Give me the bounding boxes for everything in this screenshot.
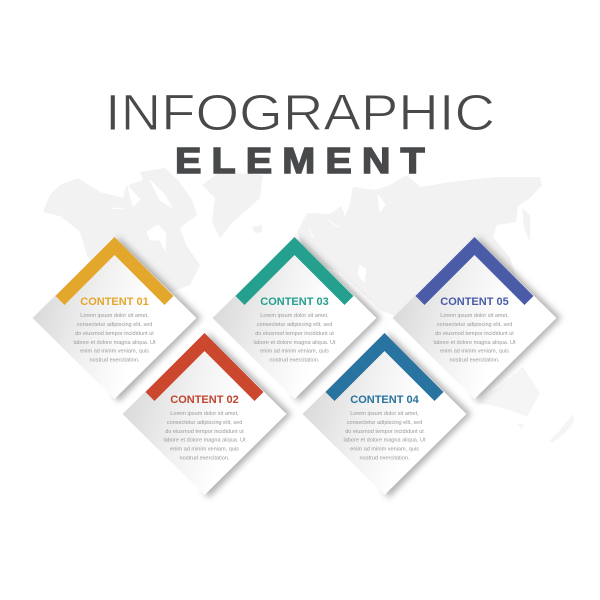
- heading: CONTENT 01: [80, 296, 149, 308]
- body text: labore et dolore magna aliqua. Ut: [433, 340, 516, 346]
- map: iceland: [252, 225, 262, 233]
- body text: labore et dolore magna aliqua. Ut: [343, 438, 426, 444]
- chevron: [236, 237, 354, 305]
- body text: do eiusmod tempor incididunt ut: [165, 429, 244, 435]
- body text: nostrud exercitation.: [90, 358, 140, 364]
- body text: do eiusmod tempor incididunt ut: [75, 331, 154, 337]
- body text: Lorem ipsum dolor sit amet,: [260, 313, 329, 319]
- body text: consectetur adipiscing elit, sed: [257, 322, 332, 328]
- chevron: [146, 333, 264, 401]
- body text: enim ad minim veniam, quis: [440, 348, 509, 354]
- map: new zealand: [549, 414, 574, 443]
- chevron: [56, 237, 174, 305]
- body text: nostrud exercitation.: [180, 456, 230, 462]
- map: bays and inlets: [112, 180, 385, 282]
- map: kamchatka and japan: [522, 208, 530, 242]
- body text: consectetur adipiscing elit, sed: [347, 420, 422, 426]
- heading: CONTENT 03: [260, 296, 329, 308]
- body text: nostrud exercitation.: [270, 358, 320, 364]
- world map background: [25, 168, 574, 443]
- map: greenland: [202, 172, 263, 238]
- body text: enim ad minim veniam, quis: [350, 446, 419, 452]
- panel: content 02: [122, 332, 292, 498]
- body text: do eiusmod tempor incididunt ut: [255, 331, 334, 337]
- title: INFOGRAPHIC: INFOGRAPHIC: [105, 84, 495, 141]
- body text: labore et dolore magna aliqua. Ut: [73, 340, 156, 346]
- panel: content 01: [32, 236, 202, 402]
- body text: Lorem ipsum dolor sit amet,: [80, 313, 149, 319]
- map: eurasia: [297, 175, 542, 330]
- heading: CONTENT 02: [170, 394, 239, 406]
- body text: Lorem ipsum dolor sit amet,: [170, 411, 239, 417]
- map: australia: [475, 367, 540, 417]
- body text: nostrud exercitation.: [450, 358, 500, 364]
- body text: labore et dolore magna aliqua. Ut: [253, 340, 336, 346]
- title: ELEMENT: ELEMENT: [175, 142, 425, 182]
- body text: enim ad minim veniam, quis: [260, 348, 329, 354]
- body text: Lorem ipsum dolor sit amet,: [440, 313, 509, 319]
- chevron: [326, 333, 444, 401]
- map: north america: [25, 168, 200, 300]
- chevron: [416, 237, 534, 305]
- body text: do eiusmod tempor incididunt ut: [435, 331, 514, 337]
- panel: content 04: [302, 332, 472, 498]
- body text: enim ad minim veniam, quis: [80, 348, 149, 354]
- body text: consectetur adipiscing elit, sed: [437, 322, 512, 328]
- body text: Lorem ipsum dolor sit amet,: [350, 411, 419, 417]
- heading: CONTENT 05: [440, 296, 509, 308]
- panel: content 03: [212, 236, 382, 402]
- body text: do eiusmod tempor incididunt ut: [345, 429, 424, 435]
- map: tasmania: [517, 424, 524, 429]
- panel: content 05: [392, 236, 562, 402]
- body text: enim ad minim veniam, quis: [170, 446, 239, 452]
- body text: nostrud exercitation.: [360, 456, 410, 462]
- body text: labore et dolore magna aliqua. Ut: [163, 438, 246, 444]
- body text: consectetur adipiscing elit, sed: [167, 420, 242, 426]
- body text: consectetur adipiscing elit, sed: [77, 322, 152, 328]
- heading: CONTENT 04: [350, 394, 420, 406]
